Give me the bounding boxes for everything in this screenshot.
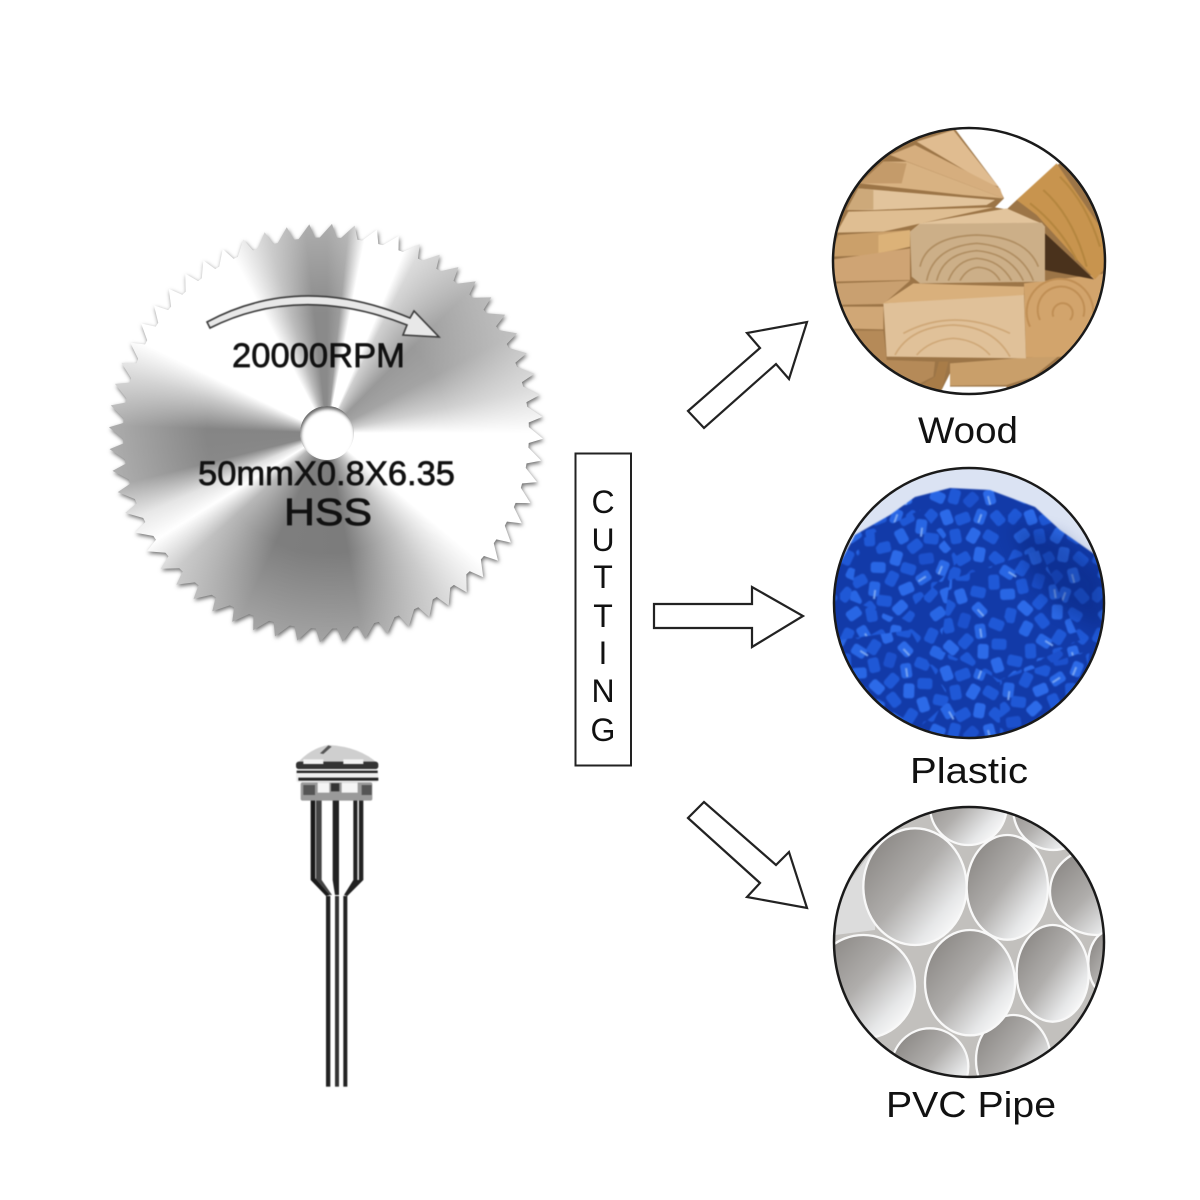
pvc pipes photo circle <box>832 806 1106 1078</box>
shank head <box>296 745 378 801</box>
vertical word: cutting: U <box>591 522 615 558</box>
vertical word: cutting: G <box>591 712 615 748</box>
vertical word: cutting <box>591 484 615 748</box>
size label: 50mmX0.8X6.35 <box>198 455 455 493</box>
label: pvc pipe: PVC Pipe <box>886 1084 1056 1125</box>
arrow: to pvc pipe <box>686 800 809 910</box>
vertical word: cutting: I <box>599 635 607 671</box>
label: plastic: Plastic <box>910 750 1028 791</box>
arrow: to wood <box>686 320 809 430</box>
shank body and taper <box>310 800 363 896</box>
saw blade <box>108 224 546 646</box>
vertical word: cutting: N <box>591 673 615 709</box>
arrow: to plastic <box>652 585 805 649</box>
vertical word: cutting: T <box>593 559 613 595</box>
shank shaft <box>326 895 347 1087</box>
speed label: 20000RPM <box>232 337 405 375</box>
label: wood: Wood <box>918 410 1018 451</box>
material label: HSS <box>284 492 372 534</box>
blade disc with brushed metal sectors <box>108 224 546 646</box>
plastic pellets photo circle <box>832 466 1106 740</box>
rotation arrow <box>207 296 439 337</box>
vertical word: cutting: C <box>591 484 615 520</box>
center hole of the blade <box>300 406 354 460</box>
cutting label box <box>574 452 632 766</box>
wood photo circle <box>832 126 1106 396</box>
vertical word: cutting: T <box>593 598 613 634</box>
